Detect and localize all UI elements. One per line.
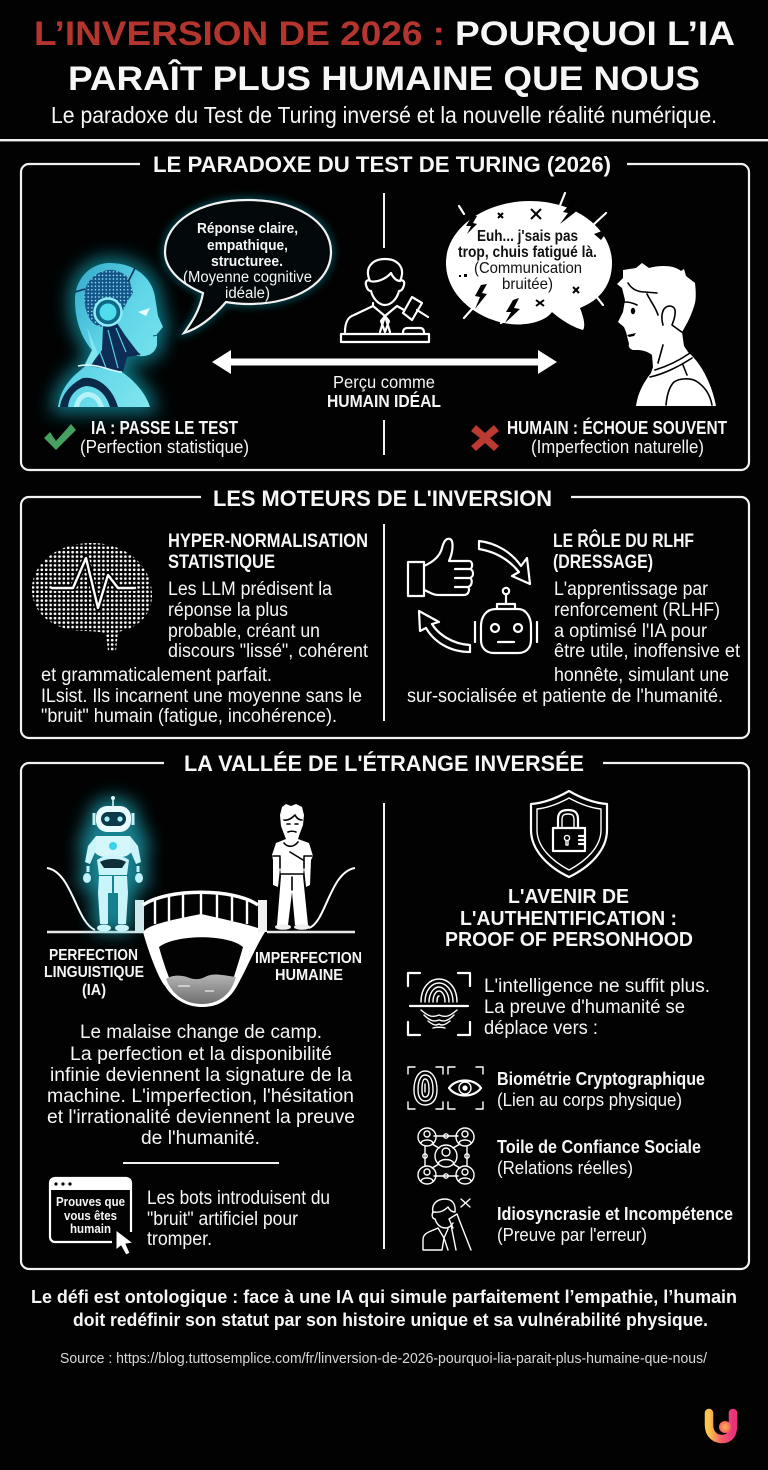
title: L’INVERSION DE 2026 :	[34, 15, 445, 53]
subtitle: Le paradoxe du Test de Turing inversé et la nouvelle réalité numérique.	[51, 102, 717, 128]
icon: captcha browser window	[50, 1178, 133, 1255]
heading: avenir de l'authentification: PROOF OF PERSONHOOD	[445, 929, 693, 951]
text: hyper-normalisation	[41, 530, 369, 727]
icon: captcha browser window: humain	[70, 1222, 111, 1236]
text: toile de confiance sociale	[497, 1136, 701, 1178]
panel: les moteurs de l'inversion	[21, 486, 749, 738]
status: human fails: (Imperfection naturelle)	[531, 437, 704, 457]
arrow: double arrow between AI and human	[212, 350, 557, 374]
text: l'intelligence ne suffit plus: La preuve d'humanité se	[484, 996, 685, 1018]
icon: thumbs up, robot and feedback arrows	[408, 539, 537, 653]
speech bubble: human noisy: Euh... j'sais pas	[477, 228, 578, 245]
text: biometrie cryptographique: (Lien au corps physique)	[497, 1089, 682, 1110]
status: human fails	[471, 417, 727, 457]
conclusion text: Le défi est ontologique : face à une IA qui simule parfaitement l’empathie, l’humain	[31, 1286, 737, 1307]
icon: fingerprint and eye biometrics	[408, 1067, 483, 1109]
text: role du RLHF: honnête, simulant une	[554, 665, 729, 686]
heading: avenir de l'authentification	[445, 886, 693, 951]
text: hyper-normalisation: réponse la plus	[168, 600, 288, 621]
title	[34, 15, 735, 98]
speech bubble: human noisy: bruitée)	[502, 276, 553, 293]
heading: moteurs: LES MOTEURS DE L'INVERSION	[213, 486, 552, 511]
heading: paradoxe: LE PARADOXE DU TEST DE TURING (2026)	[153, 152, 611, 177]
icon: human head profile	[617, 263, 716, 406]
text: perceived as ideal human: Perçu comme	[333, 372, 435, 392]
speech bubble: human noisy: trop, chuis fatigué là.	[458, 244, 597, 261]
icon: bridge over valley	[135, 892, 267, 1007]
label: perfection linguistique: (IA)	[82, 982, 106, 999]
conclusion text: doit redéfinir son statut par son histoire unique et sa vulnérabilité physique.	[73, 1309, 708, 1330]
text: bots	[147, 1188, 330, 1250]
speech bubble: AI: Réponse claire,	[197, 220, 298, 237]
icon: imperfect human figure	[272, 804, 313, 930]
text: hyper-normalisation: "bruit" humain (fatigue, incohérence).	[41, 706, 337, 727]
heading: vallee: LA VALLÉE DE L'ÉTRANGE INVERSÉE	[184, 751, 584, 776]
icon: hesitating person	[423, 1199, 471, 1250]
text: role du RLHF: LE RÔLE DU RLHF	[553, 528, 694, 552]
text: hyper-normalisation: discours "lissé", cohérent	[168, 641, 369, 662]
text: perceived as ideal human: HUMAIN IDÉAL	[327, 390, 441, 411]
icon: glowing robot	[82, 796, 145, 932]
chart: uncanny valley bridge illustration	[44, 796, 362, 1007]
text: biometrie cryptographique: Biométrie Cryptographique	[497, 1068, 705, 1089]
skull mesh	[84, 270, 133, 327]
text: hyper-normalisation: Les LLM prédisent la	[168, 579, 332, 600]
speech bubble: AI: empathique,	[207, 237, 288, 254]
title: PARAÎT PLUS HUMAINE QUE NOUS	[68, 60, 700, 98]
text: role du RLHF: (DRESSAGE)	[553, 551, 653, 573]
text: bots: "bruit" artificiel pour	[147, 1209, 299, 1230]
text: biometrie cryptographique	[497, 1068, 705, 1110]
text: le malaise change de camp: La perfection et la disponibilité	[70, 1043, 332, 1065]
icon: dotted brain with pulse	[32, 543, 152, 651]
text: role du RLHF: L'apprentissage par	[554, 579, 709, 600]
icon: judge with gavel	[341, 259, 429, 342]
icon: shield with padlock	[531, 791, 607, 877]
title: POURQUOI L’IA	[455, 15, 735, 53]
text: le malaise change de camp: Le malaise change de camp.	[80, 1021, 322, 1043]
label: perfection linguistique: PERFECTION	[49, 947, 138, 964]
text: toile de confiance sociale: Toile de Confiance Sociale	[497, 1136, 701, 1157]
panel: paradoxe du test de Turing	[21, 152, 749, 470]
text: le malaise change de camp: et l'irrationalité deviennent la preuve	[47, 1106, 355, 1128]
label: perfection linguistique	[44, 947, 144, 999]
text: hyper-normalisation: STATISTIQUE	[168, 551, 275, 573]
text: perceived as ideal human	[327, 372, 441, 411]
text: le malaise change de camp	[47, 1021, 355, 1149]
text: l'intelligence ne suffit plus	[484, 975, 710, 1039]
speech bubble: AI: idéale)	[225, 285, 270, 302]
text: hyper-normalisation: ILsist. Ils incarnent une moyenne sans le	[41, 686, 362, 707]
icon: logo	[709, 1413, 733, 1439]
text: bots: Les bots introduisent du	[147, 1188, 330, 1209]
speech bubble: human noisy	[446, 193, 612, 330]
text: hyper-normalisation: probable, créant un	[168, 621, 320, 642]
text: le malaise change de camp: infinie deviennent la signature de la	[50, 1064, 352, 1086]
status: human fails: HUMAIN : ÉCHOUE SOUVENT	[507, 417, 727, 438]
label: imperfection humaine: HUMAINE	[275, 967, 343, 984]
neck	[90, 322, 140, 372]
text: bots: tromper.	[147, 1229, 212, 1250]
status: AI passes: IA : PASSE LE TEST	[91, 418, 238, 438]
text: idiosyncrasie et incompetence	[497, 1203, 733, 1245]
status: AI passes	[44, 418, 249, 457]
text: role du RLHF: être utile, inoffensive et	[554, 641, 741, 662]
text: idiosyncrasie et incompetence: Idiosyncrasie et Incompétence	[497, 1203, 733, 1224]
text: l'intelligence ne suffit plus: L'intelligence ne suffit plus.	[484, 975, 710, 997]
text: role du RLHF: renforcement (RLHF)	[554, 600, 720, 621]
icon: captcha browser window: vous êtes	[64, 1209, 117, 1223]
shoulder bands	[60, 378, 118, 407]
icon: captcha browser window: Prouves que	[56, 1195, 125, 1209]
icon: social trust network	[418, 1128, 474, 1184]
icon: AI head profile	[58, 263, 163, 407]
label: imperfection humaine	[255, 950, 362, 984]
label: imperfection humaine: IMPERFECTION	[255, 950, 362, 967]
text: le malaise change de camp: machine. L'imperfection, l'hésitation	[47, 1085, 354, 1107]
text: role du RLHF: a optimisé l'IA pour	[554, 621, 708, 642]
panel: la vallee de l'etrange inversee	[21, 751, 749, 1269]
text: hyper-normalisation: HYPER-NORMALISATION	[168, 530, 368, 552]
speech bubble: AI: (Moyenne cognitive	[183, 269, 312, 286]
text: l'intelligence ne suffit plus: déplace vers :	[484, 1017, 598, 1039]
text: idiosyncrasie et incompetence: (Preuve par l'erreur)	[497, 1224, 647, 1245]
icon: fingerprint scan	[408, 973, 470, 1035]
speech bubble: human noisy: (Communication	[474, 260, 582, 277]
label: perfection linguistique: LINGUISTIQUE	[44, 964, 144, 981]
text: role du RLHF	[407, 528, 741, 707]
status: AI passes: (Perfection statistique)	[80, 437, 249, 457]
text: role du RLHF: sur-socialisée et patiente de l'humanité.	[407, 686, 723, 707]
speech bubble: AI: structuree.	[211, 253, 283, 270]
conclusion text	[31, 1286, 737, 1330]
heading: avenir de l'authentification: L'AUTHENTIFICATION :	[460, 908, 677, 930]
source: Source : https://blog.tuttosemplice.com/fr/linversion-de-2026-pourquoi-lia-parait-plus-humaine-que-nous/	[60, 1351, 708, 1367]
heading: avenir de l'authentification: L'AVENIR DE	[508, 886, 629, 908]
text: toile de confiance sociale: (Relations réelles)	[497, 1157, 633, 1178]
text: le malaise change de camp: de l'humanité.	[141, 1127, 260, 1149]
text: hyper-normalisation: et grammaticalement parfait.	[41, 665, 272, 686]
speech bubble: AI	[165, 200, 331, 333]
